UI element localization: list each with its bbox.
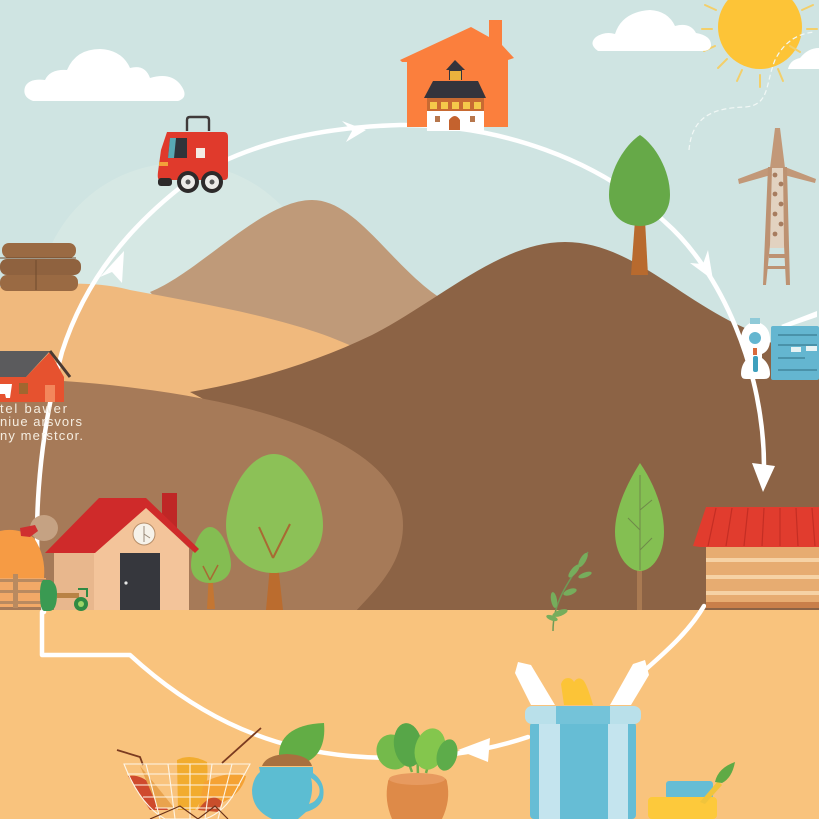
arrowhead: upper left: [100, 251, 124, 283]
garbled farm caption: [0, 401, 83, 443]
cloud: top centre: [592, 10, 711, 51]
garbled farm caption: niue arsvors: [0, 414, 82, 429]
sun: [702, 0, 817, 87]
garbled farm caption: ny merstcor.: [0, 428, 83, 443]
blue gift box: [515, 660, 649, 819]
wind turbine: [738, 128, 816, 285]
arrowhead: right: [752, 463, 775, 492]
arrowheads: [100, 121, 775, 762]
orange house with small building: [400, 20, 514, 131]
dashed route from sun: [689, 32, 815, 150]
ground: [0, 610, 819, 819]
farm barn: [0, 351, 70, 402]
large green tree: [226, 454, 323, 610]
cloud: right edge: [788, 48, 819, 69]
circular flow arrows: [37, 125, 764, 758]
back mountain: [150, 200, 452, 360]
small green tree: [191, 527, 231, 609]
seedling: [546, 552, 592, 631]
faint glow behind truck: [38, 163, 322, 447]
log pile: [0, 243, 81, 291]
green barrow: [40, 580, 88, 611]
arrowhead: top: [342, 121, 366, 142]
yellow jar with sprig: [648, 762, 735, 819]
slim leaf tree: [615, 463, 664, 610]
left sand hill: [0, 284, 360, 400]
garbled farm caption: tel bawer: [0, 401, 68, 416]
arrowhead: right upper: [690, 250, 713, 280]
red roof cottage: [45, 493, 199, 610]
tall green tree: [609, 135, 670, 275]
water and document panel: [741, 311, 819, 380]
left brown hill: [0, 378, 403, 612]
red truck: [158, 117, 228, 193]
wire basket of produce: [117, 728, 261, 819]
pumpkin and fence: [0, 515, 58, 608]
arrowhead: bottom: [458, 738, 490, 762]
spinach plant pot: [370, 721, 461, 819]
big brown mountain: [190, 242, 819, 612]
blue pot with leaf: [252, 723, 324, 819]
cloud: upper left: [24, 49, 185, 101]
market stall: [693, 507, 819, 608]
